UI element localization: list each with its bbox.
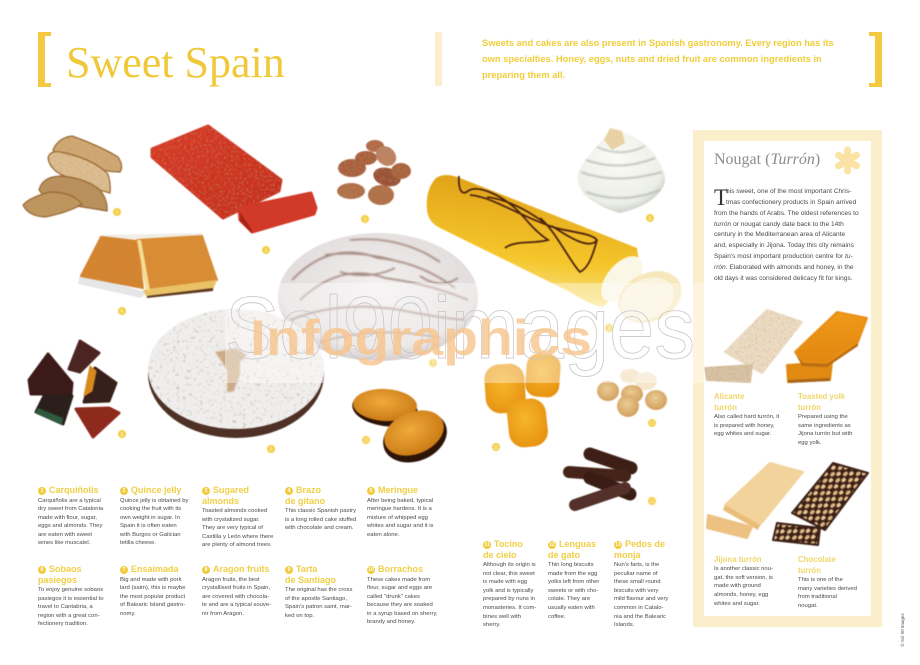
item 6: sobaos pasiegos: pasiegos [38,574,77,584]
item 2: quince jelly [120,485,188,546]
item 13: pedos de monja: these small round [614,579,660,585]
toasted yolk turrón text: same ingredients as [798,423,851,429]
watermark: Infographics [250,310,592,366]
item 13: pedos de monja: Pedos de [625,539,665,549]
item 6: sobaos pasiegos: region with a great con- [38,613,100,619]
item 9: tarta de santiago [285,564,352,619]
turrón: jijona [707,463,803,538]
item 4: brazo de gitano [285,485,356,531]
item 8: aragon fruits: crystallised fruits in Spain, [202,585,270,591]
item 6: sobaos pasiegos: pasiegos it is essential to [38,596,104,602]
item 5: meringue: 5 [370,488,372,494]
food 8: aragon fruits [29,341,119,437]
item 9: tarta de santiago: Spain's patron saint, mar- [285,604,352,610]
marker numbers: 12 [649,421,655,427]
food 13: lenguas de gato [569,454,631,505]
item 13: pedos de monja: mild flavour and very [614,596,668,602]
item 8: aragon fruits [202,564,271,617]
chocolate turrón text: from traditional [798,594,837,600]
marker numbers: 3 [364,217,367,223]
marker numbers: 1 [116,210,119,216]
food 10: borrachos [350,387,455,472]
item 6: sobaos pasiegos: To enjoy genuine sobaos [38,587,103,593]
food 12: pedos de monja [597,369,667,417]
chocolate turrón text: many varieties derived [798,586,857,592]
intro text: own specialties. Honey, eggs, nuts and dried fruit are common ingredients in [482,54,822,64]
item 12: lenguas de gato: made from the egg [548,571,597,577]
food 7: ensaimada [278,233,478,361]
item 10: borrachos: Borrachos [378,564,423,574]
nougat text: old days it was considered delicacy fit for kings. [714,275,853,282]
food 3: sugared almonds [337,140,411,205]
title: Sweet Spain [66,38,285,87]
item 3: sugared almonds: with crystalized sugar. [202,517,260,523]
item 8: aragon fruits: 8 [205,567,207,573]
item 2: quince jelly: tetilla cheese. [120,540,156,546]
item 5: meringue: eaten alone. [367,532,399,538]
item 8: aragon fruits: te and are a typical souve- [202,602,271,608]
food 6: sobaos pasiegos [78,233,217,298]
item 8: aragon fruits: are covered with chocola- [202,594,269,600]
watermark: Sol90images [225,278,695,377]
item 5: meringue: whites and sugar and it is [367,523,433,529]
item 3: sugared almonds: Sugared [213,485,249,495]
intro text: Sweets and cakes are also present in Spanish gastronomy. Every region has its [482,38,834,48]
item 2: quince jelly: Quince jelly [131,485,182,495]
item 9: tarta de santiago: of the apostle Santiago, [285,596,347,602]
item 7: ensaimada: 7 [123,567,125,573]
item 1: carquiñolis: made with flour, sugar, [38,515,97,521]
item 11: tocino de cielo: bines well with [483,614,521,620]
food 11: tocino de cielo [483,353,561,449]
item 6: sobaos pasiegos: 6 [41,567,43,573]
marker numbers [116,210,655,505]
item 11: tocino de cielo: Although its origin is [483,562,536,568]
toasted yolk turrón text: Toasted yolk [798,392,845,401]
item 2: quince jelly: with Burgos or Galician [120,532,181,538]
toasted yolk turrón text: egg yolk. [798,440,822,446]
item 11: tocino de cielo: monasteries. It com- [483,605,536,611]
item 10: borrachos: 10 [368,567,374,573]
item 1: carquiñolis: are eaten with sweet [38,532,92,538]
panel: nougat [693,130,882,627]
item 7: ensaimada [120,564,186,617]
item 7: ensaimada: the most popular product [120,594,185,600]
item 11: tocino de cielo: sherry. [483,622,501,628]
item 10: borrachos: called "drunk" cakes [367,594,420,600]
item 13: pedos de monja [614,539,668,628]
item 13: pedos de monja: peculiar name of [614,571,658,577]
item 2: quince jelly: Quince jelly is obtained by [120,498,188,504]
nougat text [714,185,859,282]
item 7: ensaimada: Ensaimada [131,564,179,574]
item 5: meringue: After being baked, typical [367,498,433,504]
credit: © Sol 90 Images [900,613,905,647]
item 11: tocino de cielo: is made with egg [483,579,527,585]
item 5: meringue [367,485,434,538]
number markers [113,208,656,505]
item 12: lenguas de gato: Thin long biscuits [548,562,594,568]
item 12: lenguas de gato: yolks left from other [548,579,599,585]
item 4: brazo de gitano: 4 [288,488,290,494]
jijona turrón text: Is another classic nou- [714,566,773,572]
alicante turrón text: is prepared with honey, [714,423,774,429]
item 1: carquiñolis: 1 [41,488,43,494]
item 1: carquiñolis: dry sweet from Catalonia [38,506,103,512]
marker numbers: 13 [649,499,655,505]
nougat text: turrón or nougat candy date back to the 14th [714,221,844,228]
chocolate turrón text: Chocolate [798,555,836,564]
item 10: borrachos [367,564,438,625]
jijona turrón text [714,555,773,607]
nougat heading: Nougat (Turrón) [714,151,820,168]
nougat text: tmas confectionery products in Spain arrived [726,199,856,206]
item 9: tarta de santiago: Tarta [296,564,317,574]
item 13: pedos de monja: common in Catalo- [614,605,663,611]
item 13: pedos de monja: nia and the Balearic [614,614,666,620]
item 10: borrachos: because they are soaked [367,602,433,608]
food 9: tarta de Santiago [148,309,324,438]
item 4: brazo de gitano: Brazo [296,485,321,495]
item 13: pedos de monja: monja [614,550,641,560]
jijona turrón text: Jijona turrón [714,555,762,564]
turrón: toasted yolk [787,312,867,383]
item 13: pedos de monja: 13 [615,542,621,548]
item 8: aragon fruits: nir from Aragon. [202,611,244,617]
item 3: sugared almonds: 3 [205,488,207,494]
item 4: brazo de gitano: is a long rolled cake stuffed [285,517,356,523]
item 9: tarta de santiago: de Santiago [285,574,336,584]
turrón: alicante [705,310,802,382]
item 13: pedos de monja: biscuits with very [614,588,659,594]
item 11: tocino de cielo: not clear, this sweet [483,571,535,577]
toasted yolk turrón text: Jijona turrón but with [798,431,852,437]
right bracket [869,32,882,87]
item 9: tarta de santiago: The original has the cross [285,587,352,593]
alicante turrón text [714,392,780,437]
item 1: carquiñolis: Carquiñolis are a typical [38,498,101,504]
item 11: tocino de cielo: Tocino [494,539,523,549]
marker numbers: 4 [608,326,611,332]
item 4: brazo de gitano: with chocolate and cream. [285,525,353,531]
item 12: lenguas de gato: 12 [549,542,555,548]
alicante turrón text: turrón [714,403,737,412]
item 12: lenguas de gato: de gato [548,550,580,560]
item 9: tarta de santiago: 9 [288,567,290,573]
toasted yolk turrón text: turrón [798,403,821,412]
jijona turrón text: gat, the soft version, is [714,575,773,581]
item 11: tocino de cielo: yolk and is typically [483,588,533,594]
item 3: sugared almonds [202,485,274,548]
item 7: ensaimada: Big and made with pork [120,576,182,582]
item 3: sugared almonds: They are very typical of [202,525,263,531]
alicante turrón text: egg whites and sugar. [714,431,771,437]
food 4: brazo de gitano [427,175,690,333]
nougat text: and, especially in Jijona. Today this city remains [714,242,854,249]
item 5: meringue: meringue hardens. It is a [367,506,432,512]
marker numbers: 5 [649,216,652,222]
item 1: carquiñolis [38,485,104,546]
item 11: tocino de cielo [483,539,536,628]
item 2: quince jelly: Spain it is often eaten [120,523,177,529]
nougat text: rrón. Elaborated with almonds and honey, in the [714,264,854,271]
chocolate turrón text: This is one of the [798,577,843,583]
item 13: pedos de monja: Nun's farts, is the [614,562,659,568]
nougat text: Spain's most important production centre for tu- [714,253,853,260]
item 11: tocino de cielo: 11 [484,542,490,548]
item 12: lenguas de gato: coffee. [548,614,566,620]
intro text: preparing them all. [482,70,565,80]
item 6: sobaos pasiegos: Sobaos [49,564,82,574]
item 10: borrachos: brandy and honey. [367,619,415,625]
jijona turrón text: made with ground [714,583,761,589]
jijona turrón text: almonds, honey, egg [714,592,768,598]
item 12: lenguas de gato [548,539,600,620]
marker numbers: 7 [432,361,435,367]
item 5: meringue: Meringue [378,485,418,495]
marker numbers: 8 [121,432,124,438]
turrón: chocolate [773,463,868,545]
item 3: sugared almonds: almonds [202,496,239,506]
item 7: ensaimada: nomy. [120,611,136,617]
nougat text: from the hands of Arabs. The oldest references to [714,210,859,217]
item 2: quince jelly: own weight in sugar. In [120,515,180,521]
chocolate turrón text: turrón [798,566,821,575]
item 6: sobaos pasiegos [38,564,104,627]
item 6: sobaos pasiegos: travel to Cantabria, a [38,604,93,610]
food 1: carquiñolis [23,136,122,217]
item 10: borrachos: These cakes made from [367,576,430,582]
item 6: sobaos pasiegos: fectionery tradition. [38,621,88,627]
intro text [482,38,834,80]
marker numbers: 2 [265,248,268,254]
alicante turrón text: Alicante [714,392,744,401]
item 4: brazo de gitano: de gitano [285,496,325,506]
chocolate turrón text: nougat. [798,603,818,609]
toasted yolk turrón text: Prepared using the [798,414,848,420]
item 11: tocino de cielo: prepared by nuns in [483,596,535,602]
marker numbers: 9 [270,447,273,453]
item 2: quince jelly: 2 [123,488,125,494]
item 1: carquiñolis: eggs and almonds. They [38,523,102,529]
nougat text: century in the Mediterranean area of Alicante [714,231,845,238]
item 3: sugared almonds: Castilla y León where there [202,534,273,540]
item 8: aragon fruits: Aragon fruits [213,564,270,574]
item 10: borrachos: flour, sugar and eggs are [367,585,432,591]
item 12: lenguas de gato: Lenguas [559,539,596,549]
food 5: meringue [578,128,665,213]
item 1: carquiñolis: Carquiñolis [49,485,99,495]
marker numbers: 10 [363,438,369,444]
marker numbers: 11 [493,445,499,451]
item 13: pedos de monja: Islands. [614,622,634,628]
item 3: sugared almonds: are plenty of almond trees. [202,542,272,548]
item 7: ensaimada: lard (saim), this is maybe [120,585,185,591]
item 4: brazo de gitano: This classic Spanish pastry [285,508,356,514]
icon: asterisk [835,146,860,174]
toasted yolk turrón text [798,392,852,446]
item 3: sugared almonds: Toasted almonds cooked [202,508,267,514]
item 10: borrachos: in a syrup based on sherry, [367,611,438,617]
item 9: tarta de santiago: ked on top. [285,613,314,619]
panel inner background [704,141,871,616]
item 12: lenguas de gato: usually eaten with [548,605,595,611]
left bracket [38,32,51,87]
jijona turrón text: whites and sugar. [714,601,760,607]
item 8: aragon fruits: Aragon fruits, the best [202,576,260,582]
turrón photographs [704,308,870,547]
food 2: quince jelly [152,126,316,233]
item 12: lenguas de gato: sweets or with cho- [548,588,598,594]
chocolate turrón text [798,555,857,609]
item 12: lenguas de gato: colate. They are [548,596,590,602]
nougat text: his sweet, one of the most important Chris- [726,188,851,195]
item 2: quince jelly: cooking the fruit with its [120,506,181,512]
item 5: meringue: mixture of whipped egg [367,515,428,521]
item 1: carquiñolis: wines like muscatel. [38,540,90,546]
item 7: ensaimada: of Balearic Island gastro- [120,602,185,608]
marker numbers: 6 [121,309,124,315]
item 11: tocino de cielo: de cielo [483,550,517,560]
nougat text: T [714,185,728,210]
header divider [435,32,442,86]
alicante turrón text: Also called hard turrón, it [714,414,779,420]
